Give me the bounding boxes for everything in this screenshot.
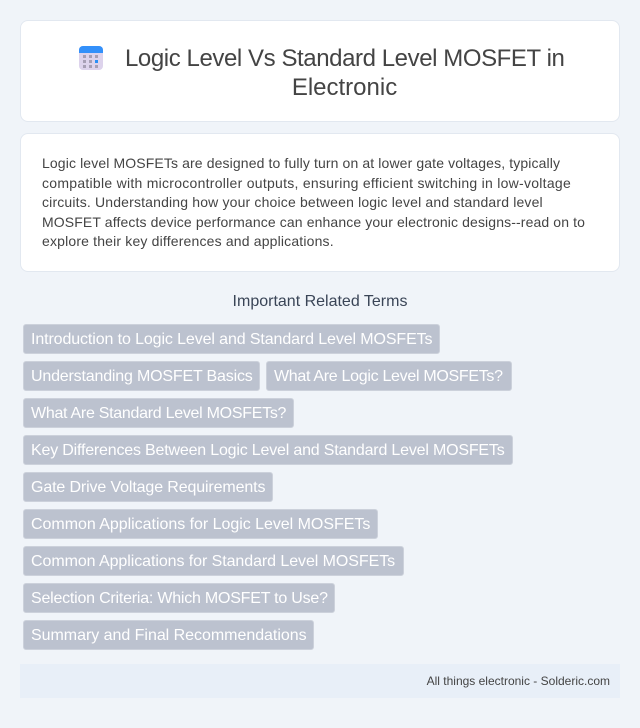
description text: Logic level MOSFETs are designed to fully turn on at lower gate voltages, typically xyxy=(42,155,560,171)
description text: circuits. Understanding how your choice between logic level and standard level xyxy=(42,194,543,210)
tag: Common Applications for Standard Level MOSFETs xyxy=(31,553,395,570)
title: Logic Level Vs Standard Level MOSFET in xyxy=(125,45,564,72)
tag: Introduction to Logic Level and Standard Level MOSFETs xyxy=(31,331,432,348)
footer xyxy=(20,664,620,698)
footer text: All things electronic - Solderic.com xyxy=(427,674,610,688)
tag xyxy=(23,546,404,576)
tag xyxy=(23,324,440,354)
tag: Understanding MOSFET Basics xyxy=(31,368,253,385)
title xyxy=(125,45,564,101)
tag: Key Differences Between Logic Level and Standard Level MOSFETs xyxy=(31,442,505,459)
description text: compatible with microcontroller outputs, ensuring efficient switching in low-voltage xyxy=(42,175,571,191)
tag: Selection Criteria: Which MOSFET to Use? xyxy=(31,590,328,607)
tag xyxy=(23,398,294,428)
description text: explore their key differences and applications. xyxy=(42,233,334,249)
tag: What Are Logic Level MOSFETs? xyxy=(274,368,503,385)
tag xyxy=(23,472,273,502)
tag: Summary and Final Recommendations xyxy=(31,627,307,644)
tag: Common Applications for Logic Level MOSFETs xyxy=(31,516,370,533)
tag list xyxy=(23,324,513,650)
tag xyxy=(23,620,314,650)
tag xyxy=(23,435,513,465)
section heading: Important Related Terms xyxy=(233,293,407,310)
tag xyxy=(266,361,512,391)
tag xyxy=(23,509,378,539)
description text xyxy=(42,155,585,249)
title: Electronic xyxy=(292,74,397,101)
header card xyxy=(20,20,620,122)
icon: calendar xyxy=(79,46,103,70)
tag xyxy=(23,583,335,613)
tag: Gate Drive Voltage Requirements xyxy=(31,479,265,496)
tag xyxy=(23,361,260,391)
description text: MOSFET affects device performance can enhance your electronic designs--read on to xyxy=(42,214,585,230)
tag: What Are Standard Level MOSFETs? xyxy=(31,405,286,422)
description card xyxy=(20,133,620,272)
